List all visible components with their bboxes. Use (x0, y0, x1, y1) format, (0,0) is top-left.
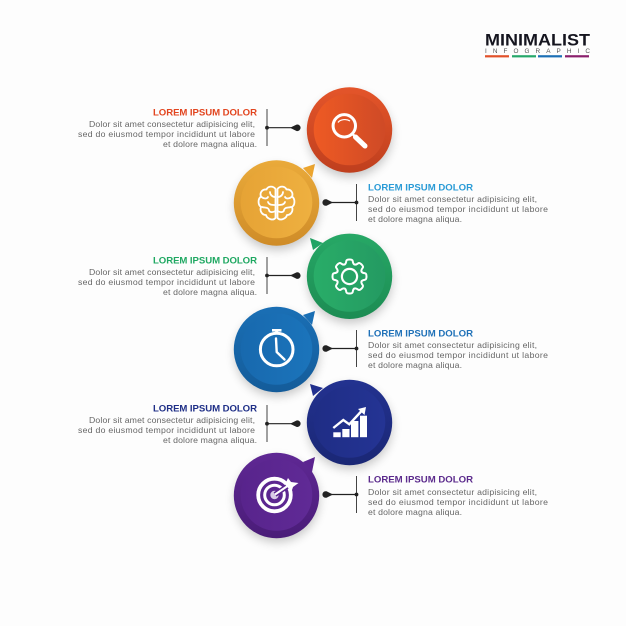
body 4: et dolore magna aliqua. (368, 360, 462, 370)
step 2 circle: brain (234, 160, 319, 250)
body 2: Dolor sit amet consectetur adipisicing elit, (368, 194, 537, 204)
connector 1 (265, 109, 301, 146)
connector 2 (322, 184, 358, 221)
icon: rising bar chart (333, 407, 367, 437)
step 1 circle: magnifier (307, 87, 392, 177)
logo: minimalist infographic (485, 30, 591, 57)
text block 3 with connector (78, 256, 301, 297)
body 3 (78, 267, 257, 297)
body 1 (78, 119, 257, 149)
icon: target (258, 478, 298, 511)
text block 2 with connector (322, 182, 548, 224)
heading 6: LOREM IPSUM DOLOR (368, 474, 473, 486)
body 5: Dolor sit amet consectetur adipisicing elit, (89, 415, 255, 425)
body 2 (368, 194, 548, 224)
body 6 (368, 487, 548, 517)
heading 1: LOREM IPSUM DOLOR (153, 108, 257, 118)
heading 5: LOREM IPSUM DOLOR (153, 404, 257, 414)
body 3: Dolor sit amet consectetur adipisicing elit, (89, 267, 255, 277)
body 5: sed do eiusmod tempor incididunt ut labore (78, 425, 255, 435)
body 1: sed do eiusmod tempor incididunt ut labore (78, 129, 255, 139)
body 6: Dolor sit amet consectetur adipisicing elit, (368, 487, 537, 497)
connector 4 (322, 330, 358, 367)
logo subtitle: INFOGRAPHIC (485, 48, 590, 55)
icon: gear (332, 260, 366, 294)
text block 5 with connector (78, 404, 301, 445)
heading 4: LOREM IPSUM DOLOR (368, 328, 473, 340)
step 4 circle: stopwatch (234, 307, 319, 396)
body 2: et dolore magna aliqua. (368, 214, 462, 224)
connector 3 (265, 257, 301, 294)
body 4 (368, 340, 548, 370)
text block 6 with connector (322, 474, 548, 517)
body 6: sed do eiusmod tempor incididunt ut labore (368, 497, 548, 507)
body 1: et dolore magna aliqua. (163, 139, 257, 149)
logo colour bars (485, 55, 589, 57)
heading 2: LOREM IPSUM DOLOR (368, 182, 473, 194)
logo title: MINIMALIST (485, 30, 591, 50)
body 4: Dolor sit amet consectetur adipisicing elit, (368, 340, 537, 350)
body 4: sed do eiusmod tempor incididunt ut labore (368, 350, 548, 360)
text block 1 with connector (78, 108, 301, 149)
connector 5 (265, 405, 301, 442)
icon: stopwatch (260, 329, 293, 366)
step 5 circle: chart (307, 380, 392, 469)
step 3 circle: gear (307, 234, 392, 323)
step 6 circle: target (234, 453, 319, 542)
icon: magnifying glass (333, 115, 365, 146)
heading 3: LOREM IPSUM DOLOR (153, 256, 257, 266)
text block 4 with connector (322, 328, 548, 370)
body 3: sed do eiusmod tempor incididunt ut labore (78, 277, 255, 287)
body 5 (78, 415, 257, 445)
body 5: et dolore magna aliqua. (163, 435, 257, 445)
connector 6 (322, 476, 358, 513)
body 6: et dolore magna aliqua. (368, 507, 462, 517)
icon: brain (259, 187, 294, 219)
body 2: sed do eiusmod tempor incididunt ut labore (368, 204, 548, 214)
body 1: Dolor sit amet consectetur adipisicing elit, (89, 119, 255, 129)
body 3: et dolore magna aliqua. (163, 287, 257, 297)
